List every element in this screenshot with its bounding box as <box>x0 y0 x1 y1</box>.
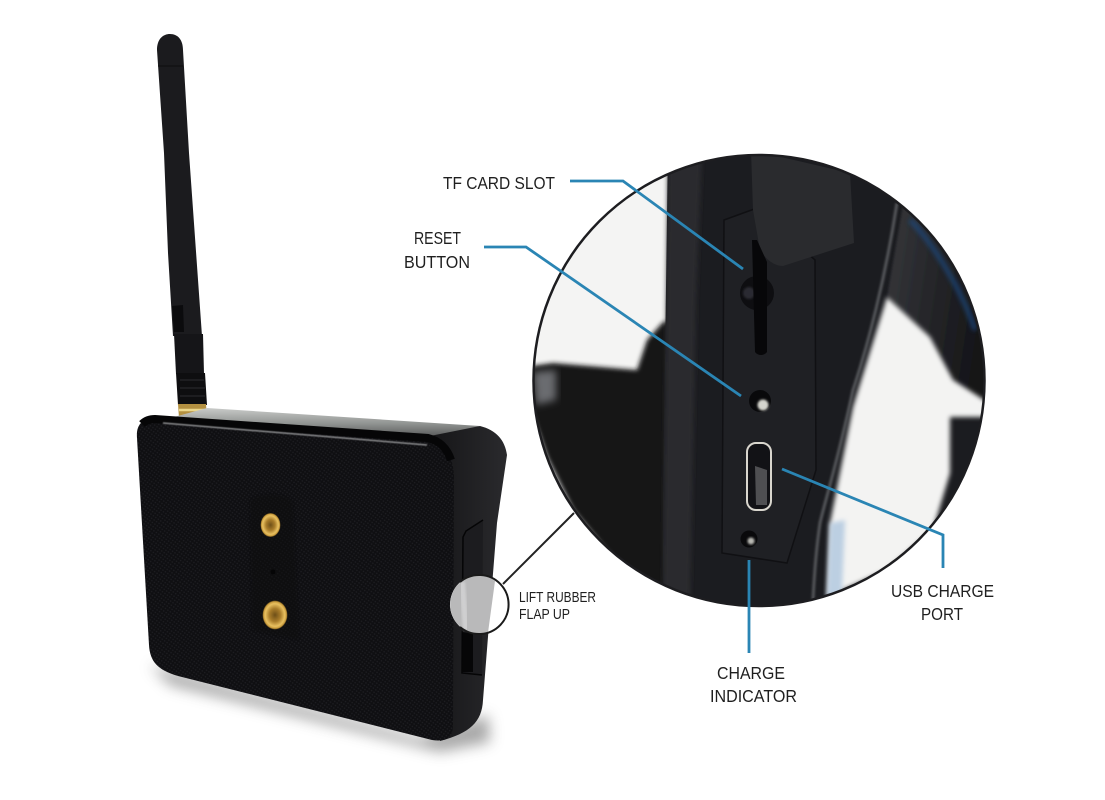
label: USB charge port: USB CHARGE <box>891 581 994 601</box>
device top face <box>163 408 480 440</box>
dark area upper right <box>887 208 983 396</box>
rim highlight <box>163 423 427 445</box>
usb contacts <box>755 466 767 505</box>
lower brass screw <box>262 600 288 630</box>
label: reset button <box>404 228 470 272</box>
flap lower recess <box>462 632 473 672</box>
device with antenna <box>137 34 507 752</box>
device body <box>663 145 995 615</box>
rubber flap <box>751 150 854 266</box>
label: lift rubber flap up: LIFT RUBBER <box>519 590 596 606</box>
device front face <box>137 419 454 740</box>
background object highlight <box>533 370 556 405</box>
label: reset button: RESET <box>414 228 461 248</box>
callout line: USB charge port <box>782 469 943 568</box>
zoom lens <box>525 145 995 615</box>
label: charge indicator: CHARGE <box>717 663 785 683</box>
charge indicator led <box>748 538 754 544</box>
glossy rim <box>142 419 451 460</box>
lens white background <box>536 176 666 368</box>
callout line: TF card slot <box>570 181 743 269</box>
blurred background object <box>534 318 666 583</box>
white area right <box>827 297 995 597</box>
label: charge indicator <box>710 663 797 706</box>
upper brass screw <box>260 513 280 537</box>
card slot <box>752 240 767 355</box>
label: reset button: BUTTON <box>404 252 470 272</box>
mounting strip <box>250 494 299 640</box>
device side face <box>425 426 507 741</box>
label: lift rubber flap up <box>519 590 596 623</box>
label: lift rubber flap up: FLAP UP <box>519 607 570 623</box>
callout line: reset button <box>484 247 741 396</box>
magnifier spot on device <box>450 575 509 634</box>
reset button <box>758 400 768 410</box>
label: TF card slot: TF CARD SLOT <box>443 173 555 193</box>
body edge strip <box>663 150 702 610</box>
center pinhole <box>270 570 276 574</box>
connector line to zoom lens <box>503 513 574 584</box>
usb port <box>747 443 771 510</box>
callout line: charge indicator <box>748 560 750 653</box>
reset hole <box>749 390 771 412</box>
socket highlight <box>743 287 755 299</box>
blue tinted reflection <box>827 520 845 600</box>
device shadow <box>150 665 490 752</box>
port panel <box>722 208 816 563</box>
label: USB charge port <box>891 581 994 624</box>
body edge ridge <box>813 203 897 600</box>
antenna <box>157 34 207 418</box>
rubber flap <box>462 520 483 675</box>
blue reflection <box>910 220 975 330</box>
card socket circle <box>740 276 774 310</box>
label: USB charge port: PORT <box>921 604 963 624</box>
charge indicator hole <box>740 530 758 548</box>
label: charge indicator: INDICATOR <box>710 686 797 706</box>
